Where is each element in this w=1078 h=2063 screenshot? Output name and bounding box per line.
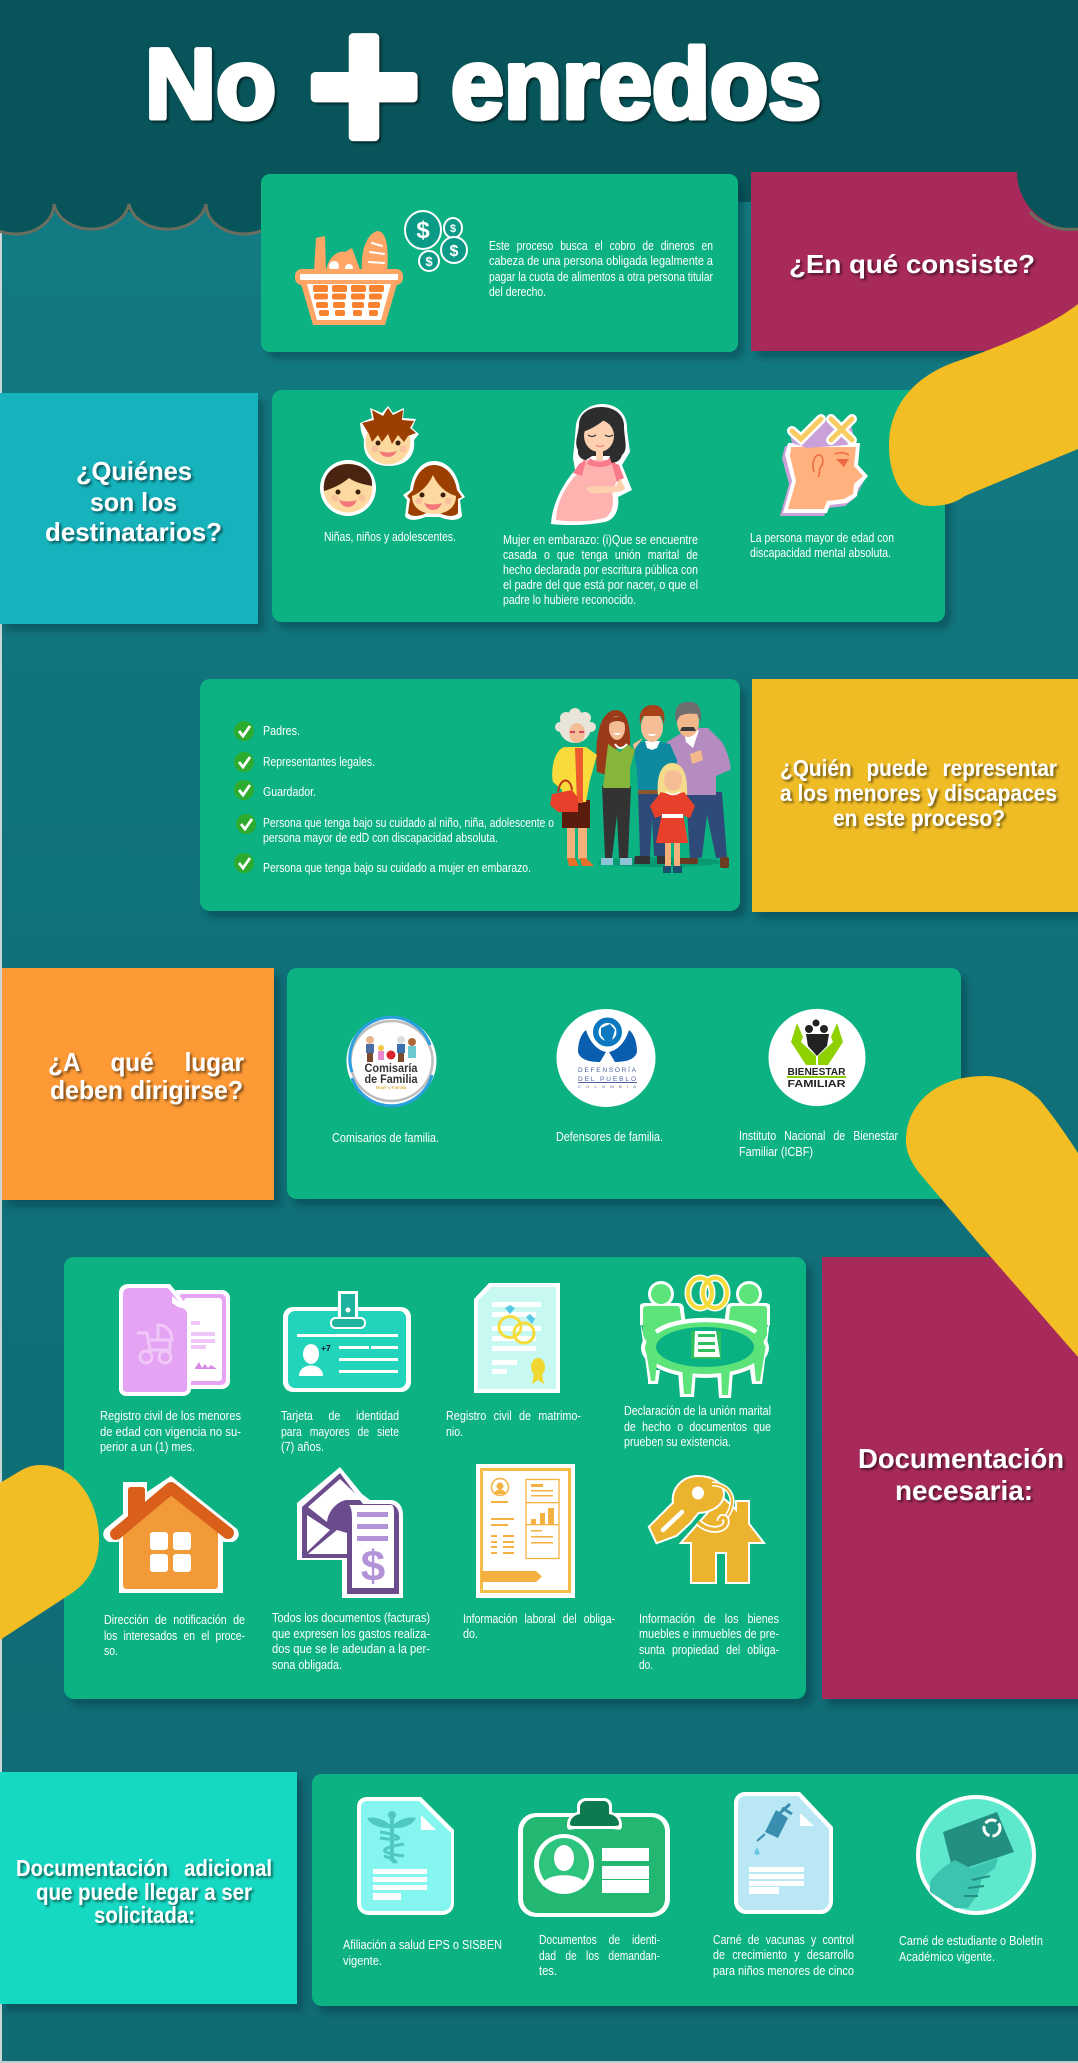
text: adult with disability: La persona mayor de edad con	[750, 531, 894, 545]
heading: quienes son los destinatarios	[45, 456, 222, 547]
heading: documentacion adicional	[16, 1855, 272, 1928]
text: comisarios: Comisarios de familia.	[332, 1131, 439, 1145]
text: definition: pagar la cuota de alimentos a otra persona titular	[489, 270, 713, 284]
panel: en que consiste card: $	[425, 254, 433, 269]
panel: en que consiste card: $	[450, 243, 459, 260]
icon: coins	[405, 211, 467, 271]
text: tarjeta de identidad: para mayores de siete	[281, 1425, 399, 1439]
text: pregnant woman: hecho declarada por escritura pública con	[503, 563, 698, 577]
text: registro civil matrimonio	[446, 1409, 581, 1439]
text: children: Niñas, niños y adolescentes.	[324, 530, 456, 544]
heading: documentacion necesaria	[858, 1443, 1064, 1506]
text: carne de estudiante: Carné de estudiante o Boletín	[899, 1934, 1043, 1948]
girl	[650, 763, 695, 873]
heading: quienes son los destinatarios: destinatarios?	[45, 517, 222, 547]
yellow blob upper right	[889, 304, 1078, 506]
red hair girl	[403, 461, 465, 520]
text: direccion: Dirección de notificación de	[104, 1613, 245, 1627]
text: informacion laboral	[463, 1612, 615, 1641]
icon: keys and house	[650, 1477, 762, 1582]
icon: civil registry with stroller	[119, 1284, 230, 1396]
panel: quienes heading	[0, 393, 258, 624]
text: registro civil menores: perior a un (1) mes.	[100, 1440, 195, 1454]
grandmother	[550, 708, 597, 866]
text: afiliacion salud	[343, 1938, 502, 1968]
icon: marriage certificate	[474, 1283, 560, 1393]
text: facturas: que expresen los gastos realiza-	[272, 1627, 430, 1641]
icon: identity badge	[518, 1798, 670, 1917]
heading: quienes son los destinatarios: ¿Quiénes	[76, 456, 192, 486]
text: documentos de identidad: dad de los demandan-	[539, 1949, 660, 1963]
text: tarjeta de identidad: Tarjeta de identidad	[281, 1409, 399, 1423]
text: pregnant woman	[503, 533, 698, 607]
icon: bienestar familiar logo	[768, 1009, 866, 1106]
young man	[633, 705, 677, 864]
icon: check list bullets	[234, 721, 256, 873]
text: pregnant woman: padre lo hubiere reconocido.	[503, 593, 636, 607]
icon: defensoria del pueblo logo: DEL PUEBLO	[578, 1076, 636, 1083]
heading: quien puede representar	[780, 755, 1057, 831]
heading: quien puede representar: a los menores y discapaces	[780, 780, 1057, 806]
text: representatives list	[263, 724, 554, 875]
text: representatives list: Guardador.	[263, 785, 316, 799]
text: defensores: Defensores de familia.	[556, 1130, 663, 1144]
text: direccion: so.	[104, 1644, 118, 1658]
text: direccion	[104, 1613, 245, 1658]
text: bienes: sunta propiedad del obliga-	[639, 1643, 779, 1657]
text: pregnant woman: el padre del que está por nacer, o que el	[503, 578, 698, 592]
text: ICBF: Instituto Nacional de Bienestar	[739, 1129, 898, 1143]
panel: documentacion necesaria card	[64, 1257, 806, 1699]
yellow blob left	[0, 1465, 99, 1640]
panel: destinatarios card	[272, 390, 945, 622]
icon: envelope and invoice	[297, 1467, 403, 1598]
text: bienes: do.	[639, 1658, 653, 1672]
panel: en que consiste heading	[751, 172, 1078, 351]
icon: bienestar familiar logo: FAMILIAR	[788, 1079, 846, 1090]
title word: enredos: enredos	[451, 28, 821, 139]
text: bienes: Información de los bienes	[639, 1612, 779, 1626]
dark hair boy	[320, 460, 376, 516]
text: carne de estudiante	[899, 1934, 1043, 1964]
icon: identity card: +7	[321, 1343, 331, 1353]
text: declaracion union marital: prueben su existencia.	[624, 1435, 731, 1449]
yellow blob middle right	[906, 1076, 1078, 1357]
text: informacion laboral: Información laboral del obliga-	[463, 1612, 615, 1626]
text: bienes: muebles e inmuebles de pre-	[639, 1627, 779, 1641]
text: registro civil menores: Registro civil de los menores	[100, 1409, 241, 1423]
panel: en que consiste card	[261, 174, 738, 352]
text: definition: cabeza de una persona obligada legalmente a	[489, 254, 713, 268]
heading: a que lugar deben dirigirse: deben dirigirse?	[50, 1075, 243, 1105]
icon: couple at table with rings	[640, 1278, 770, 1398]
heading: documentacion necesaria: Documentación	[858, 1443, 1064, 1474]
icon: envelope and invoice: $	[361, 1542, 385, 1591]
text: facturas	[272, 1611, 430, 1672]
text: carne de vacunas: Carné de vacunas y control	[713, 1933, 854, 1947]
heading: quien puede representar: ¿Quién puede representar	[780, 755, 1057, 781]
panel: a que lugar heading	[2, 968, 274, 1200]
text: carne de vacunas	[713, 1933, 854, 1978]
icon: vaccine document	[734, 1792, 833, 1914]
panel: representantes card	[200, 679, 740, 911]
text: carne de vacunas: de crecimiento y desarrollo	[713, 1948, 854, 1962]
icon: comisaria de familia logo: de Familia	[364, 1074, 418, 1086]
icon: family	[550, 702, 731, 873]
text: tarjeta de identidad	[281, 1409, 399, 1454]
icon: basket	[295, 231, 403, 325]
text: representatives list: Representantes legales.	[263, 755, 375, 769]
icon: comisaria de familia logo: Mujer y Familia	[376, 1085, 407, 1090]
text: definition	[489, 239, 713, 299]
icon: health document	[357, 1797, 454, 1915]
text: bienes	[639, 1612, 779, 1672]
text: registro civil matrimonio: nio.	[446, 1425, 463, 1439]
text: documentos de identidad	[539, 1933, 660, 1978]
heading: en que consiste: ¿En qué consiste?	[789, 249, 1035, 279]
icon: defensoria del pueblo logo	[556, 1009, 656, 1107]
icon: pregnant woman	[551, 404, 632, 525]
top right dark circle	[1017, 172, 1078, 230]
text: definition: del derecho.	[489, 285, 546, 299]
text: adult with disability	[750, 531, 894, 560]
older man	[667, 702, 731, 868]
text: pregnant woman: casada o que tenga unión marital de	[503, 548, 698, 562]
text: documentos de identidad: tes.	[539, 1964, 557, 1978]
title word: No: No	[145, 28, 276, 139]
text: ICBF: Familiar (ICBF)	[739, 1145, 813, 1159]
spiky hair boy	[360, 406, 419, 466]
panel: documentacion necesaria heading	[822, 1257, 1078, 1699]
text: afiliacion salud: Afiliación a salud EPS o SISBEN	[343, 1938, 502, 1952]
text: registro civil menores	[100, 1409, 241, 1454]
icon: house	[103, 1476, 239, 1593]
heading: documentacion adicional: Documentación adicional	[16, 1855, 272, 1881]
icon: identity card	[283, 1291, 411, 1392]
text: definition: Este proceso busca el cobro de dineros en	[489, 239, 713, 253]
panel: lugares card	[287, 968, 961, 1199]
heading: documentacion adicional: que puede llegar a ser	[36, 1879, 252, 1905]
text: facturas: dos que se le adeudan a la per-	[272, 1642, 430, 1656]
panel: quien puede representar heading	[752, 679, 1078, 912]
text: registro civil matrimonio: Registro civil de matrimo-	[446, 1409, 581, 1423]
text: registro civil menores: de edad con vigencia no su-	[100, 1425, 241, 1439]
text: representatives list: persona mayor de edD con discapacidad absoluta.	[263, 831, 498, 845]
heading: a que lugar deben dirigirse: ¿A qué lugar	[48, 1047, 244, 1077]
text: carne de vacunas: para niños menores de cinco	[713, 1964, 854, 1978]
text: declaracion union marital: de hecho o documentos que	[624, 1420, 771, 1434]
text: declaracion union marital: Declaración de la unión marital	[624, 1404, 771, 1418]
text: pregnant woman: Mujer en embarazo: (i)Que se encuentre	[503, 533, 698, 547]
icon: student card in hand	[916, 1795, 1036, 1915]
panel: en que consiste card: $	[450, 223, 456, 235]
text: facturas: sona obligada.	[272, 1658, 342, 1672]
text: representatives list: Persona que tenga bajo su cuidado al niño, niña, adolescente o	[263, 816, 554, 830]
icon: head with check and cross	[780, 419, 868, 516]
text: ICBF	[739, 1129, 898, 1159]
icon: defensoria del pueblo logo: DEFENSORÍA	[578, 1065, 637, 1074]
icon: children faces	[320, 406, 465, 520]
panel: en que consiste card: $	[416, 217, 430, 244]
text: representatives list: Padres.	[263, 724, 300, 738]
text: direccion: los interesados en el proce-	[104, 1629, 245, 1643]
header band with scallops	[0, 0, 1078, 234]
icon: bienestar familiar logo: BIENESTAR	[788, 1067, 846, 1078]
text: afiliacion salud: vigente.	[343, 1954, 382, 1968]
heading: documentacion adicional: solicitada:	[94, 1902, 195, 1928]
woman	[596, 710, 635, 865]
heading: documentacion necesaria: necesaria:	[895, 1475, 1033, 1506]
text: declaracion union marital	[624, 1404, 771, 1449]
text: carne de estudiante: Académico vigente.	[899, 1950, 995, 1964]
icon: comisaria de familia logo: Comisaría	[364, 1063, 418, 1075]
text: adult with disability: discapacidad mental absoluta.	[750, 546, 891, 560]
heading: a que lugar deben dirigirse	[48, 1047, 244, 1105]
text: informacion laboral: do.	[463, 1627, 478, 1641]
panel: documentacion adicional card	[312, 1774, 1078, 2006]
heading: quien puede representar: en este proceso?	[833, 805, 1005, 831]
text: tarjeta de identidad: (7) años.	[281, 1440, 324, 1454]
icon: comisaria de familia logo	[346, 1017, 436, 1106]
text: facturas: Todos los documentos (facturas)	[272, 1611, 430, 1625]
title	[145, 0, 821, 194]
heading: quienes son los destinatarios: son los	[90, 487, 177, 517]
icon: employment CV	[476, 1464, 575, 1598]
panel: documentacion adicional heading	[0, 1772, 297, 2004]
icon: defensoria del pueblo logo: COLOMBIA	[578, 1084, 636, 1089]
text: documentos de identidad: Documentos de identi-	[539, 1933, 660, 1947]
text: representatives list: Persona que tenga bajo su cuidado a mujer en embarazo.	[263, 861, 531, 875]
